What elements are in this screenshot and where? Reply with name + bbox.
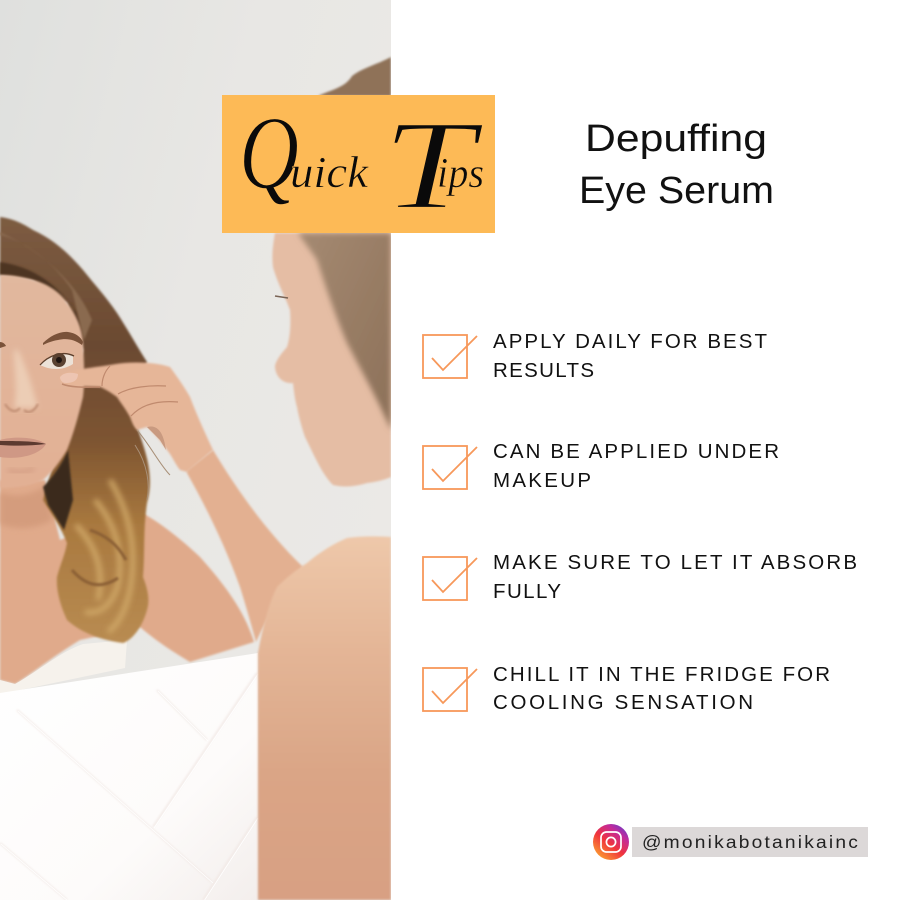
tip 3 <box>423 551 857 603</box>
heading: product name: Eye Serum <box>579 170 774 212</box>
banner title text: uick <box>290 148 370 197</box>
tip 4 text: CHILL IT IN THE FRIDGE FOR <box>493 663 830 686</box>
mirror reflection: towel <box>0 640 127 694</box>
foreground woman: side hair <box>298 233 391 430</box>
instagram handle <box>593 824 868 860</box>
tip 4 text <box>493 663 830 714</box>
tip 4 text: COOLING SENSATION <box>493 691 753 714</box>
mirror frame: white tiles <box>0 653 258 900</box>
tip 3 text: MAKE SURE TO LET IT ABSORB <box>493 551 857 574</box>
tip 1 text: RESULTS <box>493 359 594 382</box>
banner title text: Q <box>239 94 299 211</box>
quick tips banner <box>222 94 495 236</box>
mirror reflection: chest and shoulder <box>0 480 254 684</box>
tip 1 <box>423 330 767 382</box>
handle label: @monikabotanikainc <box>642 832 860 852</box>
photo: woman at mirror <box>0 0 391 900</box>
foreground woman: eye lashes <box>275 296 288 298</box>
handle label <box>632 827 868 857</box>
heading: product name <box>579 118 774 212</box>
tip 2 text: MAKEUP <box>493 469 591 492</box>
foreground woman: top of hair <box>318 57 391 96</box>
icon: orange checkbox <box>423 668 477 711</box>
tip 2 <box>423 440 779 492</box>
banner title text: ips <box>437 151 484 197</box>
banner title text: T <box>382 94 484 236</box>
icon: instagram logo <box>593 824 629 860</box>
tip 2 text <box>493 440 779 492</box>
tip 4 <box>423 663 830 714</box>
heading: product name: Depuffing <box>585 118 767 160</box>
tip 3 text <box>493 551 857 603</box>
mirror reflection: face <box>0 275 84 488</box>
icon: orange checkbox <box>423 335 477 378</box>
mirror reflection: hair <box>0 217 170 643</box>
icon: orange checkbox <box>423 557 477 600</box>
mirror reflection: hand <box>60 363 213 472</box>
tip 1 text <box>493 330 767 382</box>
tip 2 text: CAN BE APPLIED UNDER <box>493 440 779 463</box>
icon: orange checkbox <box>423 446 477 489</box>
tip 3 text: FULLY <box>493 580 561 603</box>
tip 1 text: APPLY DAILY FOR BEST <box>493 330 767 353</box>
foreground woman: face in profile <box>272 233 391 486</box>
mirror reflection: raised arm <box>187 450 303 642</box>
foreground woman: shoulder <box>258 536 391 900</box>
